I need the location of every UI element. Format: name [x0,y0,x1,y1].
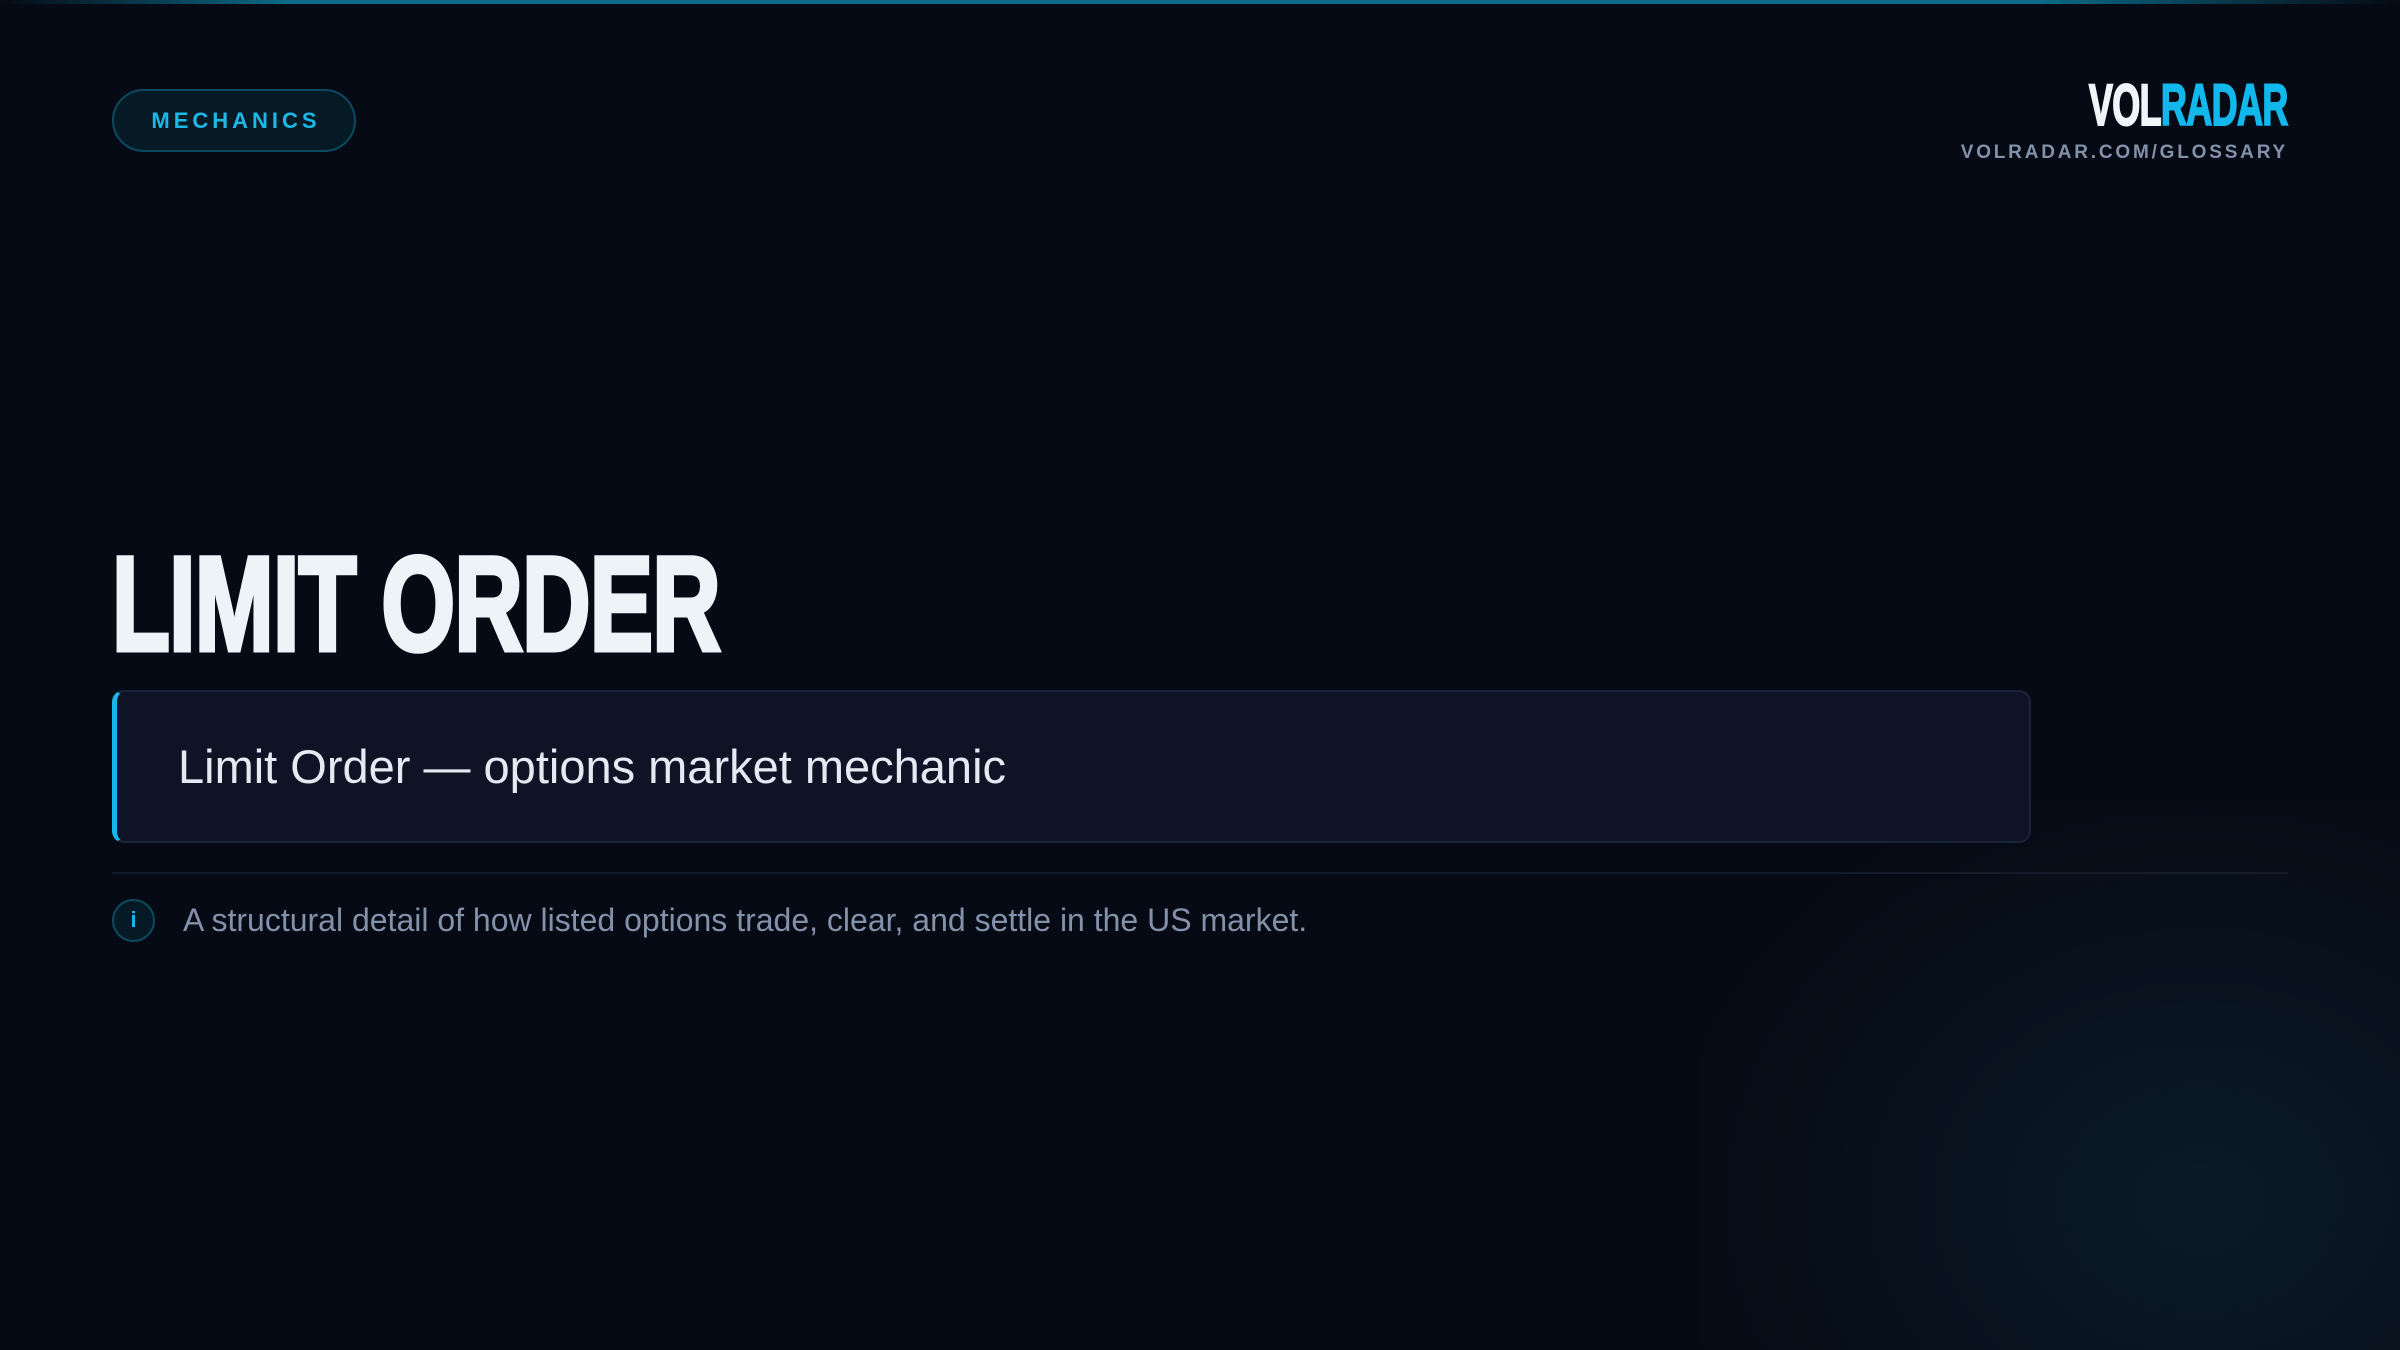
icon: info: i [130,907,137,932]
note text: A structural detail of how listed options trade, clear, and settle in the US market. [183,902,1307,938]
site url: VOLRADAR.COM/GLOSSARY [1961,142,2288,163]
logo: VOLRADAR [2089,73,2288,138]
category pill [112,89,356,152]
definition text: Limit Order — options market mechanic [178,740,1006,793]
definition box [112,690,2031,843]
icon: info [112,898,155,942]
title: LIMIT ORDER [112,530,720,679]
info note [112,899,1307,942]
category pill: MECHANICS [151,108,321,132]
